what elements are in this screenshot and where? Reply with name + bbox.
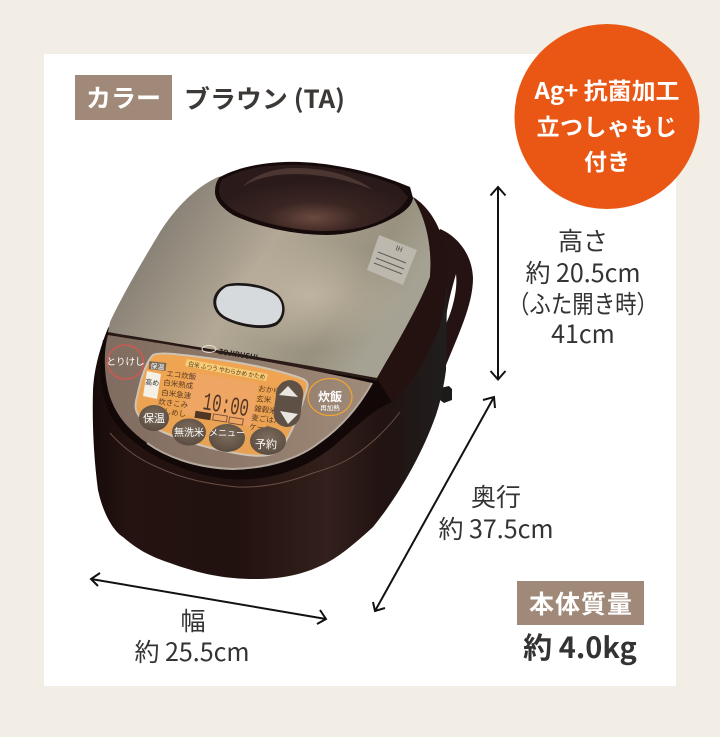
LCD menu text: エコ炊飯 bbox=[166, 368, 197, 383]
cook button: 再加熱 bbox=[320, 402, 340, 412]
badge: Ag+ shamoji: 付き bbox=[584, 143, 630, 177]
height label: 約 20.5cm bbox=[525, 254, 641, 290]
torikeshi button bbox=[106, 345, 145, 379]
LCD menu text: 白米 ふつう やわらかめ かため bbox=[188, 358, 266, 382]
height label bbox=[508, 222, 658, 351]
control button labels bbox=[143, 410, 277, 452]
right lid edge bbox=[377, 197, 447, 402]
LCD menu text: 雑穀米 bbox=[254, 403, 278, 417]
LCD menu text: ケーキ bbox=[249, 421, 272, 435]
keep warm selector bbox=[143, 361, 166, 399]
LCD indicators bbox=[194, 411, 243, 425]
color name: ブラウン (TA) bbox=[184, 80, 345, 116]
weight value: 約 4.0kg bbox=[523, 625, 637, 667]
depth label bbox=[438, 478, 554, 546]
width label: 幅 bbox=[180, 602, 206, 638]
color label: カラー bbox=[86, 79, 161, 115]
weight label: 本体質量 bbox=[529, 585, 632, 621]
LCD clock: 10:00 bbox=[201, 388, 251, 424]
width label bbox=[134, 602, 250, 669]
keep warm selector: 保温 bbox=[150, 361, 165, 373]
height label: 高さ bbox=[558, 222, 608, 258]
badge: Ag+ shamoji bbox=[514, 24, 700, 209]
rice cooker bbox=[93, 162, 473, 579]
color label bbox=[75, 75, 172, 120]
LCD menu text: 麦ごはん bbox=[251, 412, 282, 427]
arrow: height bbox=[490, 187, 506, 380]
white button bbox=[213, 283, 285, 328]
arrow buttons bbox=[272, 378, 305, 429]
control button labels: 保温 bbox=[143, 410, 165, 426]
arrow: width bbox=[91, 573, 326, 624]
LCD bbox=[136, 354, 308, 456]
label sticker bbox=[367, 235, 417, 285]
arrow: depth bbox=[373, 397, 495, 611]
panel rim bbox=[100, 340, 392, 479]
keep warm selector: 高め bbox=[145, 377, 160, 389]
control buttons bbox=[139, 405, 286, 455]
control panel bbox=[105, 333, 377, 469]
LCD menu text: すしめし bbox=[156, 405, 187, 420]
LCD menu text: 白米急速 bbox=[161, 387, 192, 402]
cook button bbox=[308, 378, 352, 416]
badge: Ag+ shamoji: 立つしゃもじ bbox=[536, 108, 678, 142]
logo: ZOJIRUSHI bbox=[218, 346, 259, 363]
width label: 約 25.5cm bbox=[134, 633, 250, 669]
control button labels: メニュー bbox=[209, 426, 245, 439]
handle bbox=[425, 229, 473, 403]
lid cap bbox=[215, 162, 413, 235]
LCD menu text: おかゆ bbox=[258, 383, 281, 397]
torikeshi button: とりけし bbox=[106, 354, 145, 368]
weight label bbox=[517, 581, 644, 625]
badge: Ag+ shamoji: Ag+ 抗菌加工 bbox=[533, 72, 680, 106]
depth label: 約 37.5cm bbox=[438, 510, 554, 546]
control button labels: 予約 bbox=[255, 436, 277, 452]
cook button: 炊飯 bbox=[318, 388, 342, 405]
white panel bbox=[44, 54, 676, 686]
control button labels: 無洗米 bbox=[174, 424, 204, 439]
LCD menu text: 玄米 bbox=[256, 393, 272, 406]
LCD menu text: 白米熟成 bbox=[163, 377, 194, 392]
height label: 41cm bbox=[551, 315, 615, 351]
lid top bbox=[108, 177, 430, 378]
body shoulder highlight bbox=[110, 412, 400, 487]
height label: （ふた開き時） bbox=[508, 285, 658, 321]
body bbox=[93, 170, 447, 579]
LCD menu text: 炊きこみ bbox=[158, 396, 189, 411]
depth label: 奥行 bbox=[471, 478, 521, 514]
LCD menu text bbox=[156, 358, 282, 435]
label sticker: IH bbox=[394, 243, 404, 255]
